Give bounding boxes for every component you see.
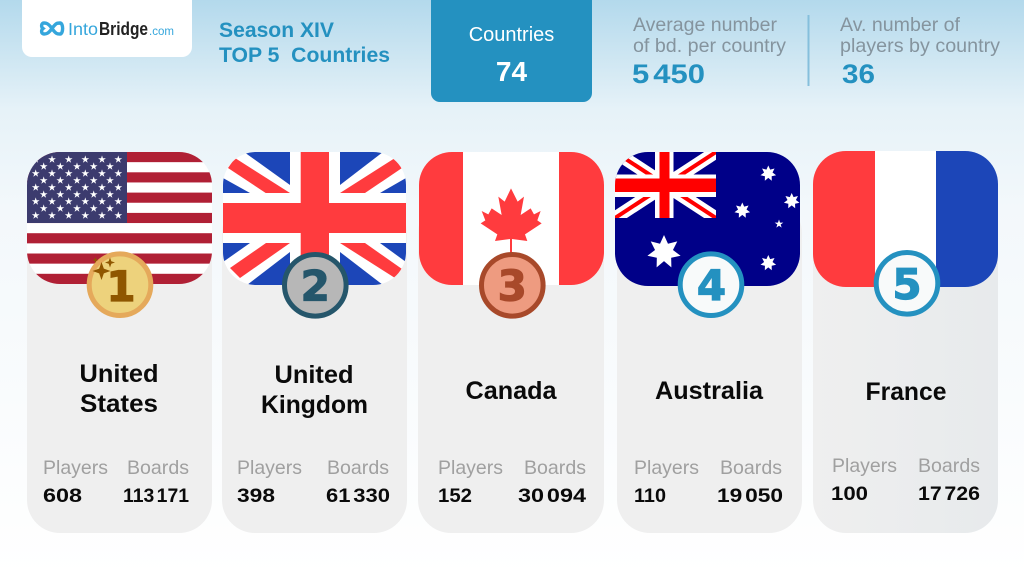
icon: IntoBridge logo mark — [42, 23, 63, 34]
medal: rank 5: 5 — [892, 260, 922, 309]
stats: United Kingdom: 61 330 — [326, 485, 390, 507]
logo wordmark: Bridge — [99, 19, 148, 39]
flag: United Kingdom — [223, 152, 406, 285]
stat: average players by country: 36 — [842, 59, 875, 89]
panel: United Kingdom — [222, 152, 407, 533]
stats: United States — [43, 457, 189, 507]
medal: rank 1 — [89, 254, 151, 316]
stat: average players by country — [840, 14, 1000, 89]
country name: France — [866, 378, 947, 406]
title — [219, 19, 390, 67]
medal: rank 1: 1 — [106, 262, 136, 311]
medal: rank 5 — [876, 252, 938, 314]
stats: United States: 608 — [43, 485, 82, 507]
stats: United Kingdom — [237, 457, 390, 507]
stats: France: 17 726 — [918, 483, 980, 505]
panel: France — [813, 151, 998, 533]
stats: United Kingdom: Players — [237, 457, 302, 479]
panel: countries total: Countries — [469, 24, 554, 46]
stat: average boards per country: Average number — [633, 14, 778, 36]
stats: Canada: 30 094 — [518, 485, 586, 507]
country name: States — [80, 390, 158, 418]
medal: rank 3 — [482, 254, 543, 316]
stat: average players by country: players by country — [840, 35, 1000, 57]
medal: rank 2: 2 — [301, 262, 330, 310]
stats: France: Players — [832, 455, 897, 477]
stats: France: Boards — [918, 455, 980, 477]
country name: Kingdom — [261, 391, 368, 419]
stat: average players by country: Av. number of — [840, 14, 961, 36]
stats: Canada — [438, 457, 586, 507]
panel: countries total — [431, 0, 592, 102]
stats: United Kingdom: Boards — [327, 457, 389, 479]
stat: average boards per country: 5 450 — [632, 59, 705, 89]
stats: Australia: Boards — [720, 457, 782, 479]
logo wordmark: Into — [68, 19, 98, 39]
country name: United — [80, 360, 158, 388]
medal: rank 3: 3 — [498, 262, 527, 310]
stats: Australia: 110 — [634, 485, 666, 507]
logo wordmark: .com — [149, 24, 174, 38]
country name: United — [274, 361, 354, 389]
stats: Canada: Boards — [524, 457, 586, 479]
medal: rank 4 — [680, 254, 742, 316]
stats: United States: 113 171 — [123, 485, 189, 507]
flag: France — [813, 151, 998, 287]
stats: United States: Players — [43, 457, 108, 479]
stats: United Kingdom: 398 — [237, 485, 275, 507]
stats: Australia: 19 050 — [717, 485, 783, 507]
title: TOP 5 Countries — [219, 44, 390, 67]
logo card — [22, 0, 192, 57]
stats: France: 100 — [831, 483, 868, 505]
flag: Canada — [419, 152, 604, 285]
stats: Canada: 152 — [438, 485, 472, 507]
stats: France — [831, 455, 980, 505]
panel: Canada — [418, 152, 604, 533]
country name — [80, 360, 158, 418]
panel: countries total: 74 — [496, 56, 527, 87]
flag: Australia — [615, 152, 800, 286]
logo wordmark — [68, 19, 174, 39]
stats: Australia — [634, 457, 783, 507]
country name: Australia — [655, 377, 764, 405]
panel: Australia — [615, 152, 802, 533]
stats: Canada: Players — [438, 457, 503, 479]
title: Season XIV — [219, 19, 334, 42]
flag: United States — [27, 152, 212, 284]
stats: Australia: Players — [634, 457, 699, 479]
country name — [261, 361, 368, 419]
medal: rank 4: 4 — [697, 261, 726, 310]
panel: United States — [27, 152, 212, 533]
stat: average boards per country: of bd. per country — [633, 35, 786, 57]
medal: rank 2 — [284, 254, 346, 316]
country name: Canada — [466, 377, 558, 405]
stat: average boards per country — [632, 14, 786, 89]
stats: United States: Boards — [127, 457, 189, 479]
